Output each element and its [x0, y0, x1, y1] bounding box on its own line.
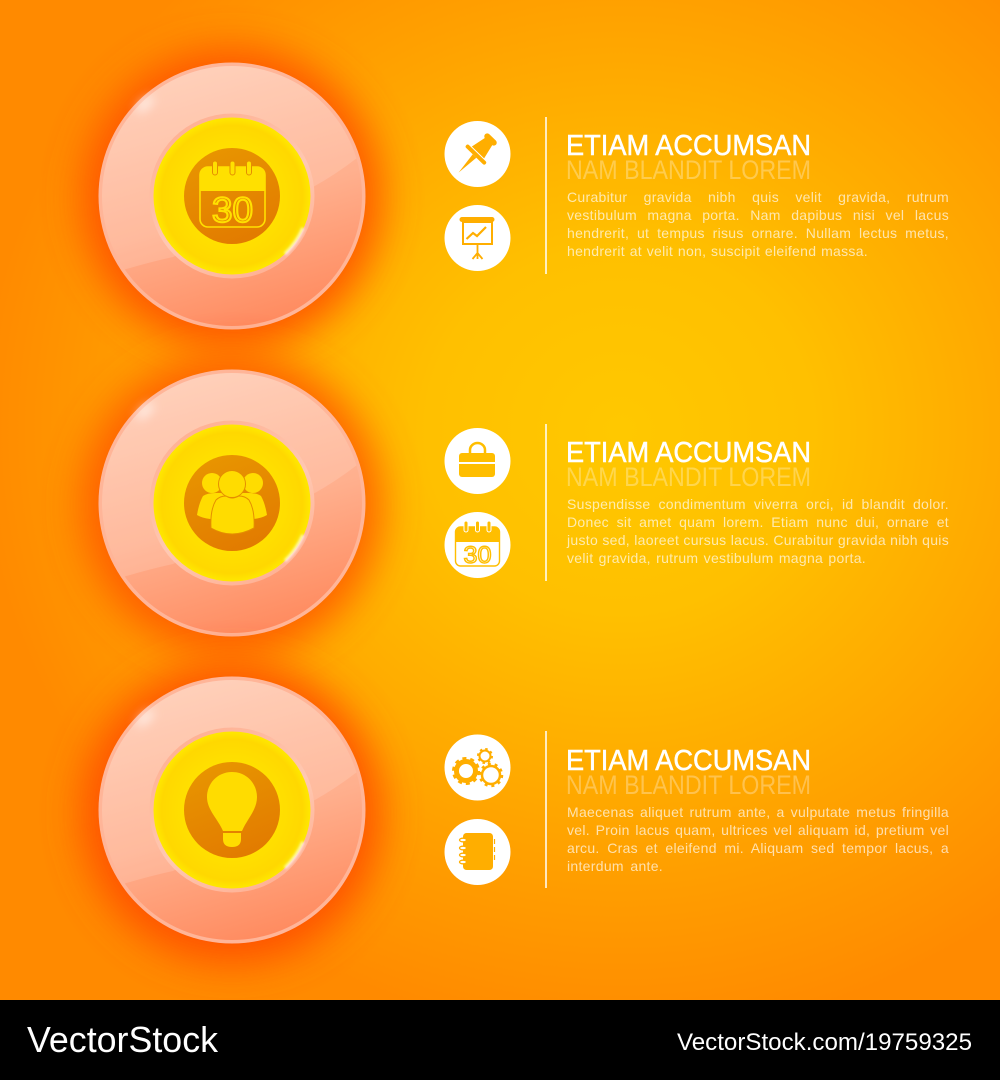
icon: light bulb: [207, 772, 257, 847]
icon: calendar: [200, 161, 265, 230]
glass ring 3: [82, 663, 382, 963]
body text 3: Maecenas aliquet rutrum ante, a vulputate metus fringilla: [567, 804, 949, 820]
body text 1: [567, 189, 949, 259]
heading 2: NAM BLANDIT LOREM: [566, 462, 811, 492]
body text 2: justo sed, laoreet cursus lacus. Curabitur gravida nibh quis: [567, 532, 949, 548]
icon: notebook: [444, 819, 510, 885]
divider 1: [545, 117, 547, 274]
body text 1: hendrerit, ut tempus risus ornare. Nullam lectus metus,: [567, 225, 949, 241]
icon: small calendar: 30: [464, 542, 492, 569]
glass ring 2: [82, 355, 382, 655]
icon: calendar: 30: [212, 191, 253, 230]
icon: push pin: [444, 121, 510, 187]
heading 2: ETIAM ACCUMSAN: [566, 437, 811, 469]
icon: presentation board: [444, 205, 510, 271]
glass ring 1: [82, 48, 382, 348]
body text 2: Suspendisse condimentum viverra orci, id blandit dolor.: [567, 496, 949, 512]
heading 1: [566, 130, 811, 185]
icon: team of people: [197, 470, 267, 534]
body text 3: [567, 804, 949, 874]
body text 2: velit gravida, rutrum vestibulum magna porta.: [567, 550, 866, 566]
divider 2: [545, 424, 547, 581]
footer url: VectorStock.com/19759325: [677, 1029, 972, 1056]
icon: briefcase: [444, 428, 510, 494]
heading 3: ETIAM ACCUMSAN: [566, 745, 811, 777]
body text 2: Donec sit amet quam lorem. Etiam nunc dui, ornare et: [567, 514, 949, 530]
body text 3: interdum ante.: [567, 858, 663, 874]
divider 3: [545, 731, 547, 888]
footer logo: VectorStock: [27, 1019, 219, 1060]
body text 3: vel. Proin lacus quam, ultrices vel aliquam id, pretium vel: [567, 822, 949, 838]
heading 1: NAM BLANDIT LOREM: [566, 155, 811, 185]
icon: small calendar: [444, 512, 510, 578]
icon: gears: [444, 734, 510, 800]
heading 1: ETIAM ACCUMSAN: [566, 130, 811, 162]
body text 2: [566, 496, 949, 566]
footer bar: [0, 1000, 1000, 1080]
heading 2: [566, 437, 811, 492]
body text 3: arcu. Cras et eleifend mi. Aliquam sed tempor lacus, a: [567, 840, 949, 856]
body text 1: Curabitur gravida nibh quis velit gravida, rutrum: [567, 189, 949, 205]
body text 1: vestibulum magna porta. Nam dapibus nisi vel lacus: [567, 207, 949, 223]
heading 3: [566, 745, 811, 800]
body text 1: hendrerit at velit non, suscipit eleifend massa.: [567, 243, 868, 259]
heading 3: NAM BLANDIT LOREM: [566, 770, 811, 800]
